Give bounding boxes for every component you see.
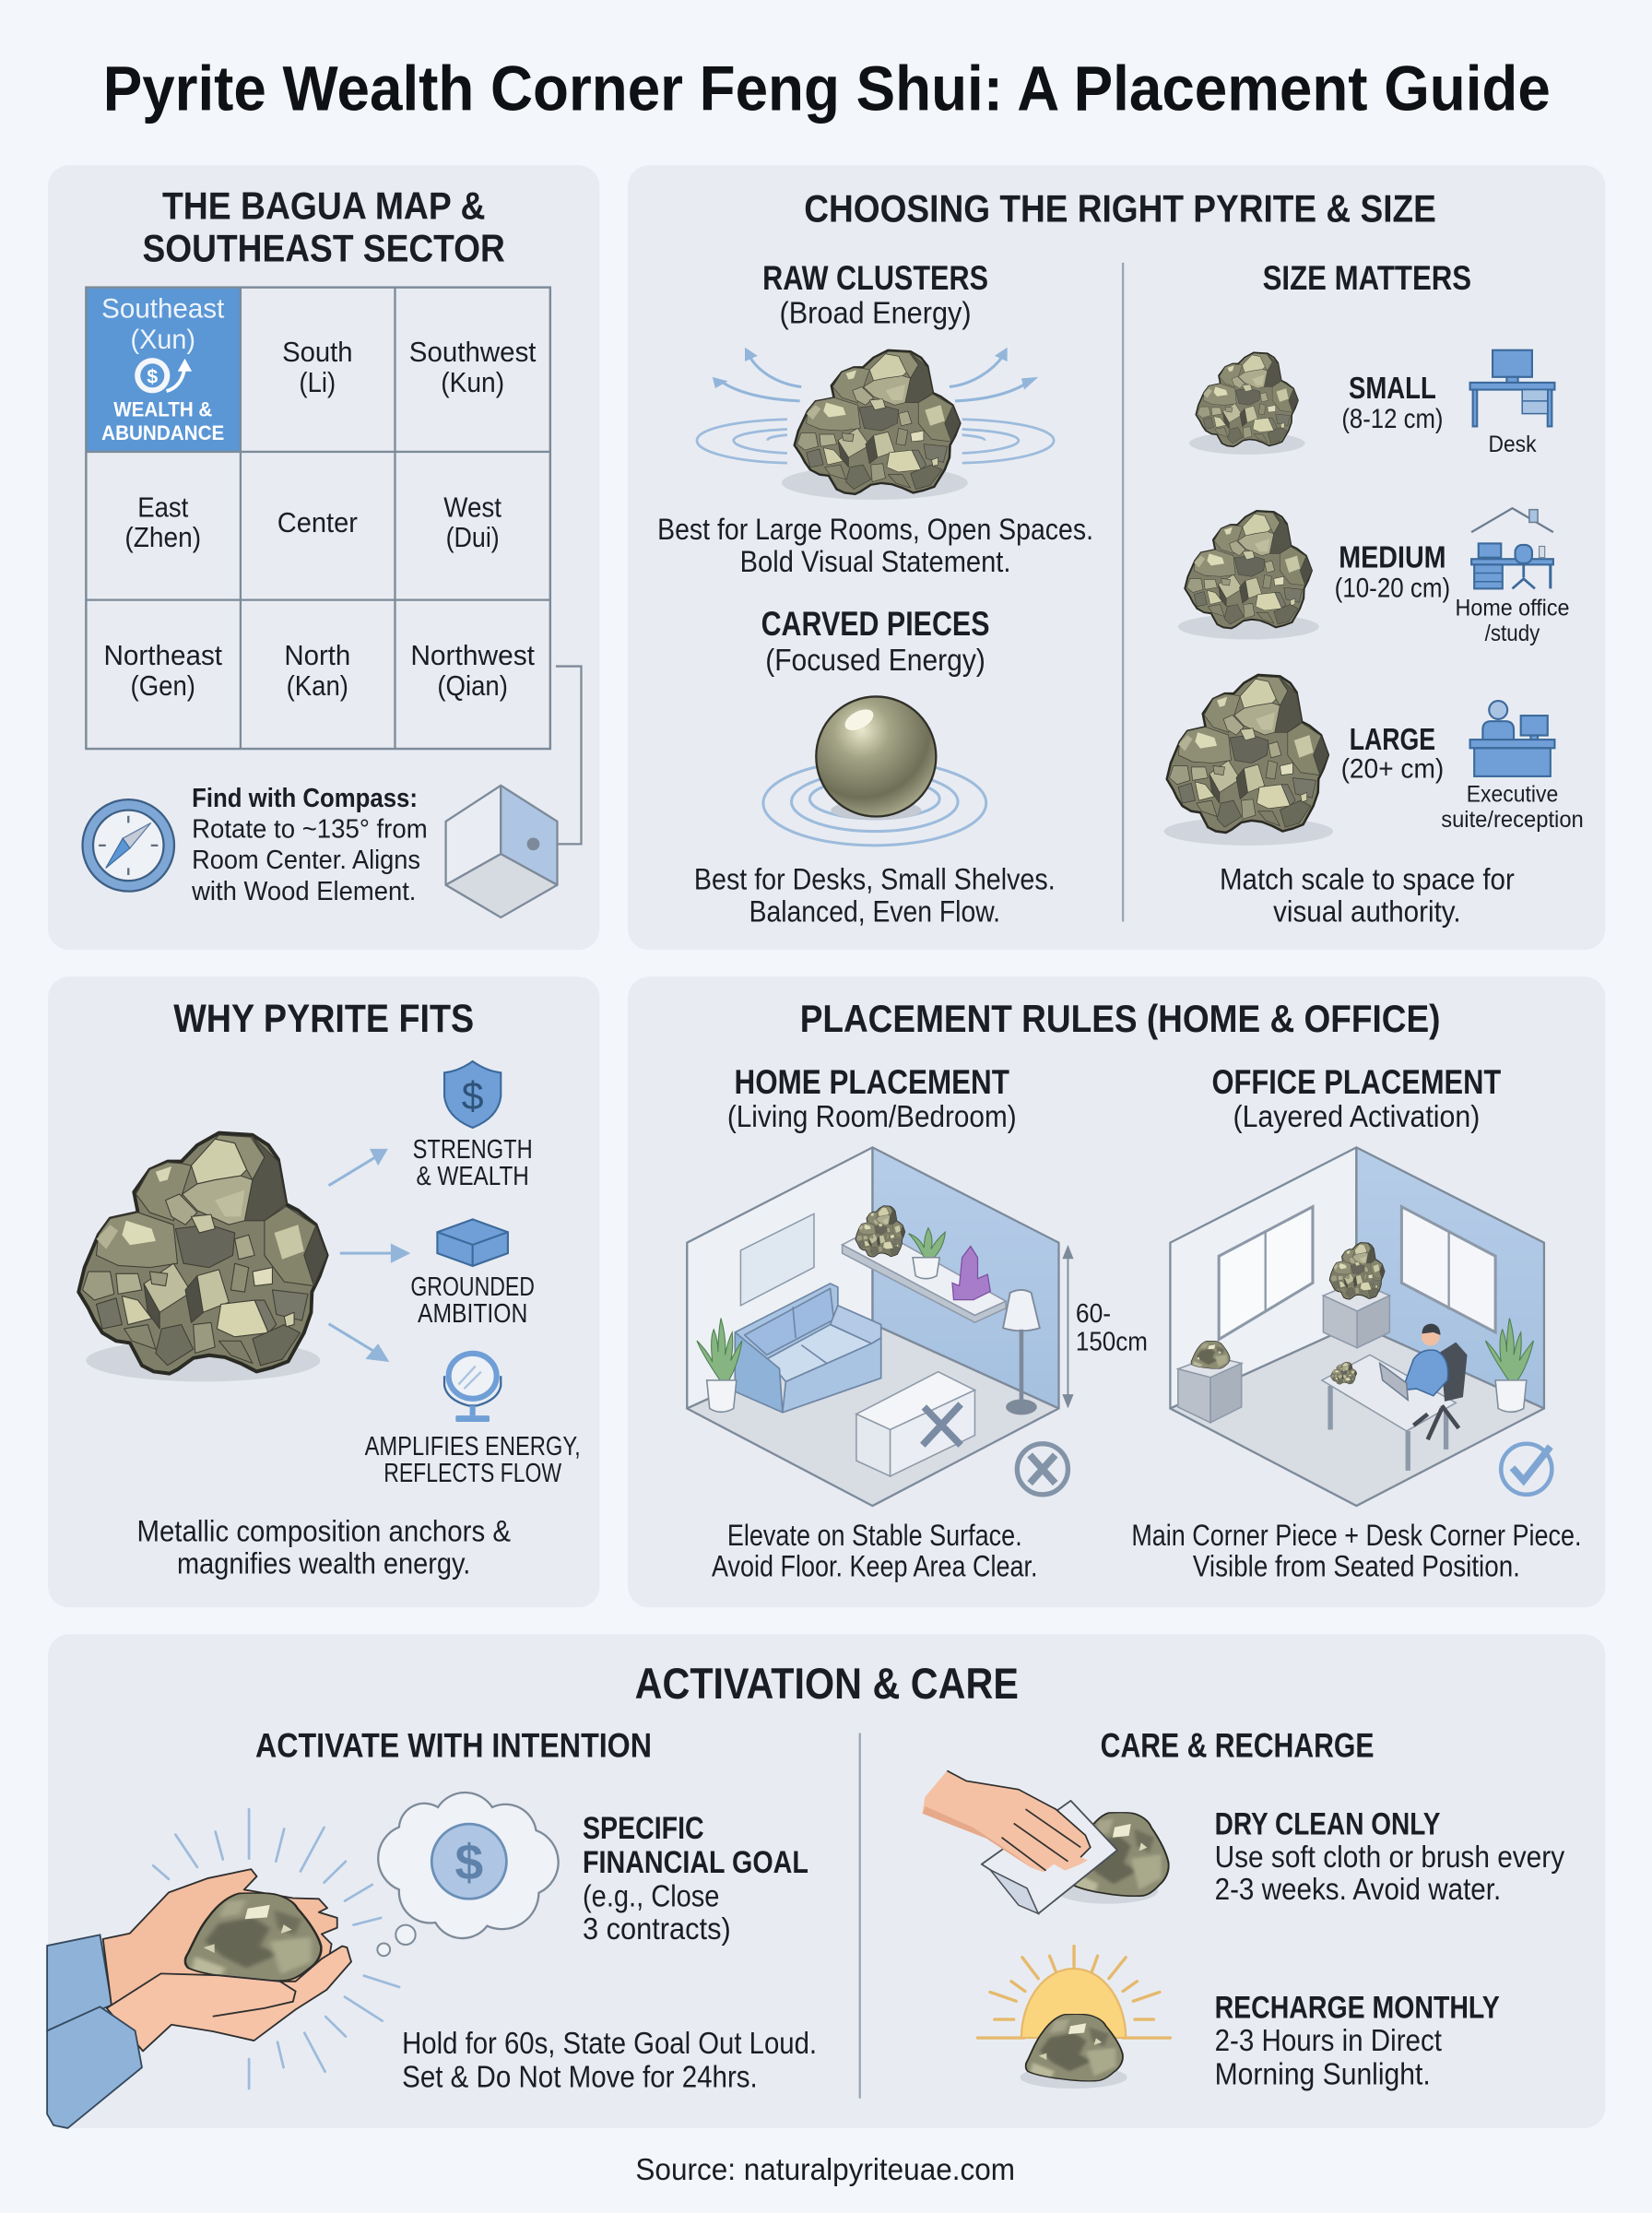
icon: shield xyxy=(444,1061,501,1128)
small label xyxy=(1341,372,1444,434)
crystal xyxy=(952,1247,990,1300)
corner pyrite xyxy=(1329,1243,1385,1299)
compass instructions: Rotate to ~135° from xyxy=(192,814,428,844)
icon: room cube xyxy=(446,786,557,917)
icon: desk xyxy=(1470,350,1554,426)
raw clusters text: Bold Visual Statement. xyxy=(740,545,1010,578)
recharge text: Morning Sunlight. xyxy=(1215,2057,1431,2091)
medium label xyxy=(1335,540,1450,604)
heading: choosing: CHOOSING THE RIGHT PYRITE & SIZE xyxy=(804,187,1436,230)
desk pyrite xyxy=(1330,1362,1357,1384)
icon: mirror xyxy=(444,1354,501,1422)
radiating energy rays xyxy=(153,1809,399,2089)
home placement heading xyxy=(727,1063,1017,1133)
icon: home office xyxy=(1471,508,1553,588)
heading: bagua xyxy=(143,183,505,269)
heading: bagua: SOUTHEAST SECTOR xyxy=(143,226,505,269)
grounded label: AMBITION xyxy=(418,1299,527,1329)
corner pedestal xyxy=(1323,1282,1389,1348)
icon: shield: $ xyxy=(462,1074,484,1118)
arrow: to strength xyxy=(329,1149,388,1186)
compass instructions: with Wood Element. xyxy=(191,877,416,906)
executive label: suite/reception xyxy=(1441,807,1584,833)
icon: block xyxy=(437,1219,508,1266)
icon: executive desk xyxy=(1470,701,1554,776)
other sector labels: (Gen) xyxy=(131,670,195,702)
icon: approved check xyxy=(1501,1444,1552,1495)
raw clusters heading xyxy=(762,259,988,331)
other sector labels: (Zhen) xyxy=(124,522,201,553)
blocked floor box xyxy=(856,1372,974,1476)
other sector labels: Northeast xyxy=(103,640,223,671)
height dimension arrow xyxy=(1062,1245,1074,1408)
executive label: Executive xyxy=(1467,781,1558,807)
wall picture xyxy=(740,1213,814,1306)
large pyrite specimen xyxy=(78,1133,327,1381)
carved pieces text: Best for Desks, Small Shelves. xyxy=(694,862,1056,895)
thought bubble with dollar coin xyxy=(377,1793,559,1956)
compass instructions: Find with Compass: xyxy=(192,784,418,813)
other sector labels: (Kan) xyxy=(287,670,348,702)
other sector labels: East xyxy=(137,491,189,523)
height label: 150cm xyxy=(1076,1328,1148,1357)
financial goal text: (e.g., Close xyxy=(583,1879,719,1913)
small label: (8-12 cm) xyxy=(1341,404,1444,434)
title: Pyrite Wealth Corner Feng Shui: A Placement Guide xyxy=(103,53,1551,124)
heading: activation: ACTIVATION & CARE xyxy=(635,1660,1019,1709)
grounded label: GROUNDED xyxy=(410,1272,535,1302)
other sector labels: North xyxy=(284,640,350,671)
thought bubble with dollar coin: $ xyxy=(455,1834,483,1891)
carved pieces heading: CARVED PIECES xyxy=(761,605,990,643)
office desk xyxy=(1322,1355,1456,1471)
large rock xyxy=(1164,675,1333,846)
side pedestal with stone xyxy=(1178,1341,1242,1423)
other sector labels: Southwest xyxy=(409,337,537,368)
strength label xyxy=(413,1135,533,1191)
office placement heading: (Layered Activation) xyxy=(1233,1099,1480,1133)
connector line xyxy=(533,667,581,844)
recharge text: 2-3 Hours in Direct xyxy=(1215,2023,1442,2057)
financial goal text: SPECIFIC xyxy=(583,1811,704,1846)
financial goal text: 3 contracts) xyxy=(583,1911,731,1946)
dry clean text: DRY CLEAN ONLY xyxy=(1215,1807,1440,1842)
home room illustration xyxy=(687,1147,1059,1506)
other sector labels: (Dui) xyxy=(446,522,500,553)
office caption: Visible from Seated Position. xyxy=(1193,1550,1520,1583)
recharge text xyxy=(1215,1991,1500,2091)
financial goal text: FINANCIAL GOAL xyxy=(583,1845,808,1880)
hands holding pyrite xyxy=(47,1869,351,2128)
medium rock xyxy=(1178,511,1319,639)
other sector labels: (Kun) xyxy=(441,367,504,398)
office caption xyxy=(1131,1519,1581,1583)
home caption: Avoid Floor. Keep Area Clear. xyxy=(712,1550,1038,1583)
sofa xyxy=(735,1284,881,1413)
medium label: MEDIUM xyxy=(1339,540,1446,574)
large label xyxy=(1341,723,1444,784)
height label: 60- xyxy=(1076,1299,1111,1329)
grounded label xyxy=(410,1272,535,1329)
icon: avoid circle xyxy=(1017,1444,1068,1495)
small rock xyxy=(1189,352,1305,455)
activation instruction: Hold for 60s, State Goal Out Loud. xyxy=(402,2026,817,2060)
why pyrite text: Metallic composition anchors & xyxy=(136,1514,511,1547)
home office label xyxy=(1456,595,1569,646)
amplifies label xyxy=(365,1432,581,1488)
source line: Source: naturalpyriteuae.com xyxy=(635,2152,1015,2186)
bagua grid xyxy=(86,288,550,749)
raw clusters heading: (Broad Energy) xyxy=(779,297,972,331)
activation instruction: Set & Do Not Move for 24hrs. xyxy=(402,2060,758,2094)
raw clusters text xyxy=(657,513,1093,578)
executive label xyxy=(1441,781,1584,833)
home caption xyxy=(712,1519,1038,1583)
other sector labels: (Li) xyxy=(299,367,336,398)
southeast cell: Southeast xyxy=(101,294,225,325)
heading: bagua: THE BAGUA MAP & xyxy=(162,183,485,227)
southeast cell: WEALTH & xyxy=(113,398,212,421)
raw cluster illustration xyxy=(697,348,1054,500)
recharge text: RECHARGE MONTHLY xyxy=(1215,1991,1500,2026)
other sector labels: (Qian) xyxy=(437,670,508,702)
dry clean text: 2-3 weeks. Avoid water. xyxy=(1215,1872,1501,1906)
why pyrite text: magnifies wealth energy. xyxy=(177,1547,470,1580)
shelf pyrite xyxy=(856,1206,905,1257)
hand cleaning pyrite xyxy=(923,1770,1169,1913)
carved pieces heading: (Focused Energy) xyxy=(765,644,985,678)
strength label: & WEALTH xyxy=(416,1162,529,1191)
why pyrite text xyxy=(136,1514,511,1580)
carved pieces heading xyxy=(761,605,990,678)
compass instructions: Room Center. Aligns xyxy=(192,846,420,875)
southeast cell: ABUNDANCE xyxy=(101,421,224,444)
other sector labels: South xyxy=(282,337,353,368)
carved pieces text: Balanced, Even Flow. xyxy=(749,895,1000,929)
panel: placement rules xyxy=(628,976,1605,1607)
panel: choosing pyrite xyxy=(628,165,1605,950)
activation instruction xyxy=(402,2026,817,2094)
size matters text: Match scale to space for xyxy=(1220,862,1515,895)
large label: (20+ cm) xyxy=(1341,753,1444,784)
heading: why pyrite: WHY PYRITE FITS xyxy=(173,997,474,1041)
panel: bagua map xyxy=(48,165,599,950)
care heading: CARE & RECHARGE xyxy=(1101,1726,1375,1764)
shelf xyxy=(843,1228,1006,1322)
arrow: to amplifies xyxy=(329,1324,389,1362)
panel: activation and care xyxy=(47,1634,1605,2128)
dry clean text xyxy=(1215,1807,1565,1906)
other sector labels: Center xyxy=(277,507,358,538)
southeast cell: (Xun) xyxy=(131,325,195,355)
financial goal text xyxy=(583,1811,808,1946)
raw clusters heading: RAW CLUSTERS xyxy=(762,259,988,297)
raw clusters text: Best for Large Rooms, Open Spaces. xyxy=(657,513,1093,546)
size matters text xyxy=(1220,862,1515,929)
home placement heading: HOME PLACEMENT xyxy=(735,1063,1009,1101)
office caption: Main Corner Piece + Desk Corner Piece. xyxy=(1131,1519,1581,1552)
amplifies label: AMPLIFIES ENERGY, xyxy=(365,1432,581,1462)
compass instructions xyxy=(191,784,428,906)
floor lamp xyxy=(1003,1290,1040,1414)
height label xyxy=(1076,1299,1148,1357)
panel: why pyrite fits xyxy=(48,976,599,1607)
right window xyxy=(1401,1207,1495,1332)
floor plant xyxy=(697,1319,742,1412)
home office label: /study xyxy=(1485,621,1540,646)
strength label: STRENGTH xyxy=(413,1135,533,1165)
large label: LARGE xyxy=(1350,723,1435,757)
home placement heading: (Living Room/Bedroom) xyxy=(727,1099,1017,1133)
southeast cell: $ xyxy=(147,366,158,388)
size matters heading: SIZE MATTERS xyxy=(1263,259,1471,297)
home office label: Home office xyxy=(1456,595,1569,621)
medium label: (10-20 cm) xyxy=(1335,574,1450,604)
office plant xyxy=(1485,1319,1533,1412)
other sector labels: West xyxy=(443,491,502,523)
sun recharging pyrite xyxy=(978,1947,1171,2089)
home caption: Elevate on Stable Surface. xyxy=(727,1519,1022,1552)
office placement heading xyxy=(1212,1063,1502,1133)
amplifies label: REFLECTS FLOW xyxy=(384,1459,562,1488)
small label: SMALL xyxy=(1349,372,1436,406)
office placement heading: OFFICE PLACEMENT xyxy=(1212,1063,1502,1101)
office room illustration xyxy=(1170,1147,1544,1506)
arrow: to grounded xyxy=(340,1243,410,1263)
person at desk xyxy=(1380,1324,1468,1439)
dry clean text: Use soft cloth or brush every xyxy=(1215,1840,1565,1874)
icon: compass xyxy=(83,799,174,892)
other sector labels: Northwest xyxy=(410,640,535,671)
size matters text: visual authority. xyxy=(1273,895,1461,929)
southeast cell xyxy=(101,294,225,444)
shelf plant xyxy=(909,1228,945,1279)
left window xyxy=(1219,1207,1313,1340)
carved pieces text xyxy=(694,862,1056,929)
heading: placement rules: PLACEMENT RULES (HOME & OFFICE) xyxy=(800,998,1440,1040)
other sector labels xyxy=(103,337,537,702)
desk label: Desk xyxy=(1488,432,1537,457)
carved sphere illustration xyxy=(763,696,986,846)
activate heading: ACTIVATE WITH INTENTION xyxy=(255,1726,652,1764)
